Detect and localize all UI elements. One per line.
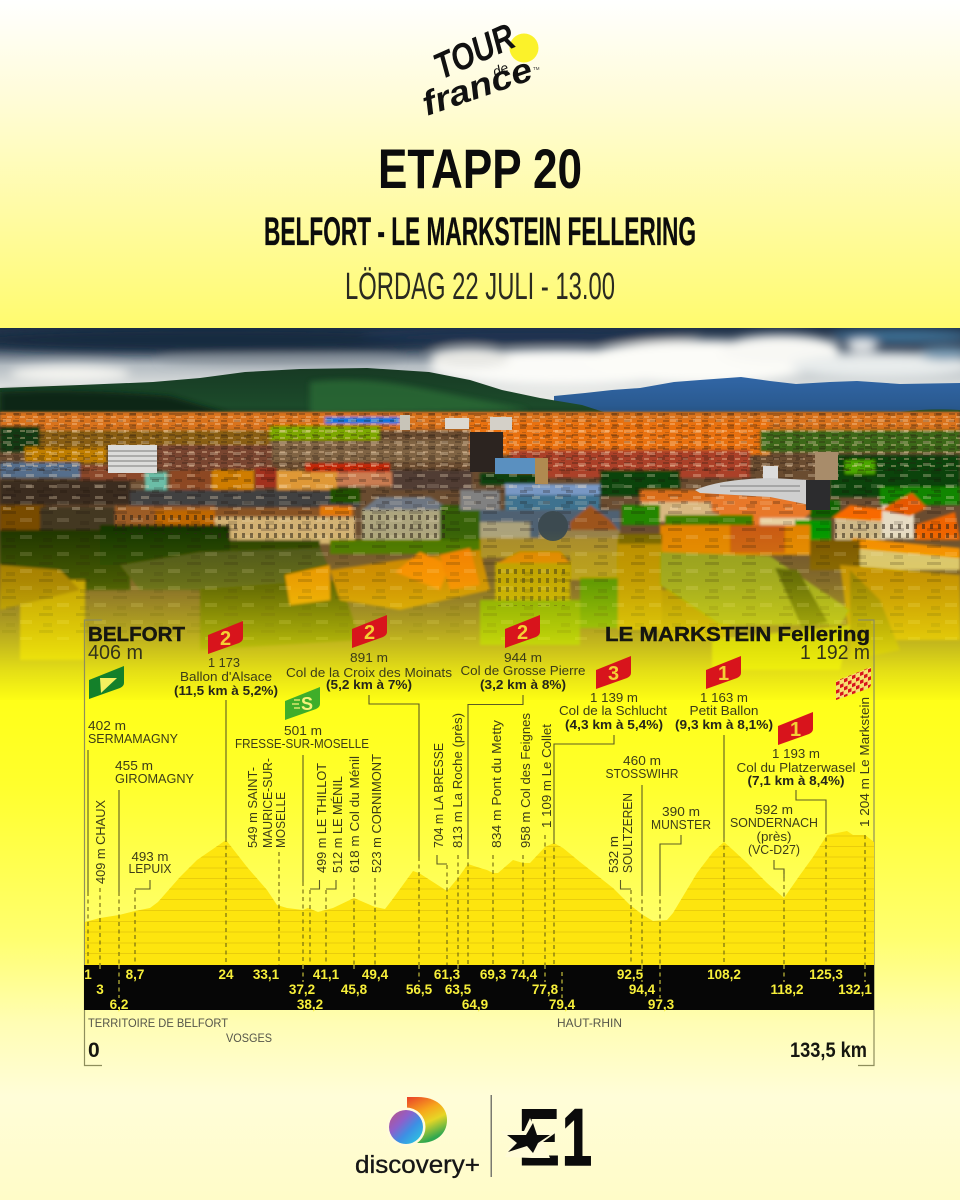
vertical label: Col des Feignes: 958 m Col des Feignes [518, 713, 533, 848]
vertical label: Saint-Maurice-sur-Moselle: 549 m SAINT- [245, 767, 260, 848]
label: Sermamagny: SERMAMAGNY [88, 731, 178, 746]
vertical label: Chaux: 409 m CHAUX [93, 800, 108, 884]
kilometre values: 97,3 [648, 997, 675, 1012]
kilometre values: 118,2 [770, 982, 804, 997]
icon: category 3 flag, Col de la Schlucht [596, 656, 631, 689]
label: Giromagny: GIROMAGNY [115, 771, 194, 786]
icon: category 2 flag, Col de la Croix des Moinats: 2 [364, 622, 375, 644]
finish block: Le Markstein Fellering [605, 624, 870, 664]
department: Territoire de Belfort: TERRITOIRE DE BELFORT [88, 1016, 229, 1030]
vertical label: Saint-Maurice-sur-Moselle [245, 758, 288, 848]
kilometre values: 49,4 [362, 967, 389, 982]
page background: lower gradient [0, 680, 960, 1200]
label: Ballon d'Alsace: 1 173 [208, 655, 240, 670]
label: Munster: MUNSTER [651, 817, 711, 832]
icon: category 2 flag, Ballon d'Alsace [208, 621, 243, 654]
vertical label: Le Markstein: 1 204 m Le Markstein [857, 697, 872, 827]
icon: category 1 flag, Petit Ballon: 1 [718, 663, 729, 685]
label: Col du Platzerwasel: (7,1 km à 8,4%) [748, 774, 844, 788]
label: Ballon d'Alsace: (11,5 km à 5,2%) [174, 684, 278, 698]
label: Col de la Schlucht: (4,3 km à 5,4%) [565, 718, 663, 732]
label: Petit Ballon: Petit Ballon [690, 703, 758, 718]
kilometre band [84, 965, 874, 1010]
vertical label: Col du Ménil: 618 m Col du Ménil [347, 756, 362, 873]
label: Sondernach: 592 m [755, 802, 793, 817]
label: Stosswihr [606, 753, 678, 892]
city base [0, 412, 960, 702]
label: Col de Grosse Pierre: Col de Grosse Pierre [460, 663, 586, 678]
kilometre values: 94,4 [629, 982, 656, 997]
icon: start flag [89, 666, 124, 699]
photo: aerial view of Belfort [0, 328, 960, 702]
label: Col du Platzerwasel: 1 193 m [772, 746, 820, 761]
department: Vosges: VOSGES [226, 1031, 272, 1045]
vertical label: Saint-Maurice-sur-Moselle: MOSELLE [273, 792, 288, 848]
icon: finish flag [836, 667, 871, 700]
logo: Tour de France [417, 16, 540, 124]
vertical label: Soultzeren: 532 m [606, 836, 621, 873]
icon: sprint flag: S [301, 694, 313, 714]
icon: category 2 flag, Ballon d'Alsace: 2 [220, 628, 231, 650]
vertical label: Le Thillot: 499 m LE THILLOT [314, 763, 329, 873]
kilometre values: 125,3 [809, 967, 843, 982]
vertical label: La Bresse: 704 m LA BRESSE [431, 743, 446, 848]
label: Petit Ballon: 1 163 m [700, 690, 748, 705]
icon: category 3 flag, Col de la Schlucht: 3 [608, 663, 619, 685]
kilometre values: 38,2 [297, 997, 323, 1012]
label: Stosswihr: 460 m [623, 753, 661, 768]
icon: category 2 flag, Col de la Croix des Moinats [352, 615, 387, 648]
title: stage number: ETAPP 20 [378, 137, 582, 200]
kilometre values: 69,3 [480, 967, 507, 982]
distance total: 133,5 km [790, 1039, 867, 1062]
label: Sondernach: (VC-D27) [748, 842, 800, 857]
kilometre values: 79,4 [549, 997, 576, 1012]
dashed markers [88, 830, 865, 965]
kilometre values: 41,1 [313, 967, 340, 982]
vertical label: Le Ménil: 512 m LE MÉNIL [330, 776, 345, 873]
start block: Belfort [88, 624, 185, 664]
vertical label: Soultzeren: SOULTZEREN [620, 793, 635, 873]
logo: Tour de France: TM [533, 66, 540, 71]
kilometre values: 61,3 [434, 967, 461, 982]
roof and window textures [0, 412, 960, 472]
label: Giromagny [115, 758, 194, 892]
label: Col de la Schlucht: Col de la Schlucht [559, 703, 667, 718]
label: Sermamagny [88, 718, 178, 892]
label: Lepuix [128, 849, 172, 889]
vertical label: Saint-Maurice-sur-Moselle: MAURICE-SUR- [260, 758, 275, 848]
kilometre values: 8,7 [126, 967, 144, 982]
icon: category 1 flag, Col du Platzerwasel [778, 712, 813, 745]
kilometre values: 77,8 [532, 982, 559, 997]
logo: discovery+: discovery+ [355, 1151, 480, 1179]
kilometre values: 33,1 [253, 967, 280, 982]
label: Munster: 390 m [662, 804, 700, 819]
logo: Tour de France: de [490, 59, 511, 80]
kilometre values: 3 [96, 982, 104, 997]
label: Col de la Croix des Moinats: (5,2 km à 7%) [326, 678, 412, 692]
kilometre values: 92,5 [617, 967, 644, 982]
label: Col du Platzerwasel [736, 746, 856, 830]
label: Fresse-sur-Moselle: 501 m [284, 723, 322, 738]
label: Col de la Schlucht [554, 690, 667, 840]
kilometre values: 108,2 [707, 967, 741, 982]
vertical label: Le Ménil [326, 776, 345, 889]
kilometre values: 45,8 [341, 982, 368, 997]
icon: category 1 flag, Col du Platzerwasel: 1 [790, 719, 801, 741]
label: Sondernach: SONDERNACH [730, 815, 818, 830]
label: Lepuix: LEPUIX [128, 861, 172, 876]
logo: Tour de France: france [417, 51, 537, 124]
logo: E1: E [518, 1093, 560, 1183]
label: Col de Grosse Pierre: (3,2 km à 8%) [480, 678, 566, 692]
label: Sermamagny: 402 m [88, 718, 126, 733]
label: Col du Platzerwasel: Col du Platzerwasel [736, 760, 856, 775]
label: Lepuix: 493 m [132, 849, 168, 864]
icon: category 1 flag, Petit Ballon [706, 656, 741, 689]
divider between logos [490, 1095, 492, 1177]
label: Col de Grosse Pierre [460, 650, 586, 855]
landmark buildings [108, 445, 157, 473]
logo: Tour de France: TOUR [428, 16, 521, 87]
yellow fade [0, 530, 960, 702]
vertical label: Le Thillot [310, 763, 329, 889]
kilometre values: 132,1 [838, 982, 872, 997]
kilometre values [84, 967, 872, 1012]
label: Giromagny: 455 m [115, 758, 153, 773]
vertical label: La Roche: 813 m La Roche (près) [450, 713, 465, 848]
profile stripes [85, 836, 874, 954]
kilometre values: 37,2 [289, 982, 315, 997]
subheading: date and time: LÖRDAG 22 JULI - 13.00 [345, 266, 615, 308]
kilometre values: 1 [84, 967, 92, 982]
label: Col de Grosse Pierre: 944 m [504, 650, 542, 665]
label: Col de la Schlucht: 1 139 m [590, 690, 638, 705]
vertical label: Le Collet: 1 109 m Le Collet [539, 724, 554, 828]
logo: E1 [500, 1093, 592, 1183]
vertical label: Pont du Metty: 834 m Pont du Metty [489, 719, 504, 848]
profile area [85, 831, 874, 965]
department: Haut-Rhin: HAUT-RHIN [557, 1016, 622, 1030]
start block: Belfort: 406 m [88, 642, 143, 664]
label: Col de la Croix des Moinats [286, 650, 453, 857]
finish block: Le Markstein Fellering: 1 192 m [800, 642, 870, 664]
elevation profile chart [84, 615, 874, 1066]
logo: E1: 1 [562, 1093, 592, 1183]
vertical label: Cornimont: 523 m CORNIMONT [369, 754, 384, 873]
icon: category 2 flag, Col de Grosse Pierre: 2 [517, 622, 528, 644]
label: Stosswihr: STOSSWIHR [606, 766, 678, 781]
vertical label: Soultzeren [606, 793, 635, 889]
label: Col de la Croix des Moinats: 891 m [350, 650, 388, 665]
kilometre values: 64,9 [462, 997, 488, 1012]
label: Sondernach: (près) [756, 829, 792, 844]
start block: Belfort: BELFORT [88, 624, 185, 646]
label: Ballon d'Alsace [174, 655, 278, 838]
label: Sondernach [730, 802, 818, 878]
icon: sprint flag [285, 687, 320, 720]
kilometre values: 74,4 [511, 967, 538, 982]
label: Col de la Croix des Moinats: Col de la Croix des Moinats [286, 665, 453, 680]
distance start: 0 [88, 1039, 100, 1062]
finish block: Le Markstein Fellering: LE MARKSTEIN Fellering [605, 624, 870, 646]
kilometre values: 24 [218, 967, 234, 982]
label: Fresse-sur-Moselle: FRESSE-SUR-MOSELLE [235, 736, 369, 751]
chart frame [84, 620, 874, 1066]
logo: discovery+ [355, 1097, 480, 1179]
label: Fresse-sur-Moselle [235, 723, 369, 882]
label: Ballon d'Alsace: Ballon d'Alsace [180, 669, 272, 684]
label: Munster [651, 804, 711, 892]
page background: top gradient [0, 0, 960, 328]
kilometre values: 56,5 [406, 982, 433, 997]
label: Petit Ballon [675, 690, 773, 838]
icon: category 2 flag, Col de Grosse Pierre [505, 615, 540, 648]
kilometre values: 63,5 [445, 982, 472, 997]
kilometre values: 6,2 [110, 997, 128, 1012]
label: Petit Ballon: (9,3 km à 8,1%) [675, 718, 773, 732]
